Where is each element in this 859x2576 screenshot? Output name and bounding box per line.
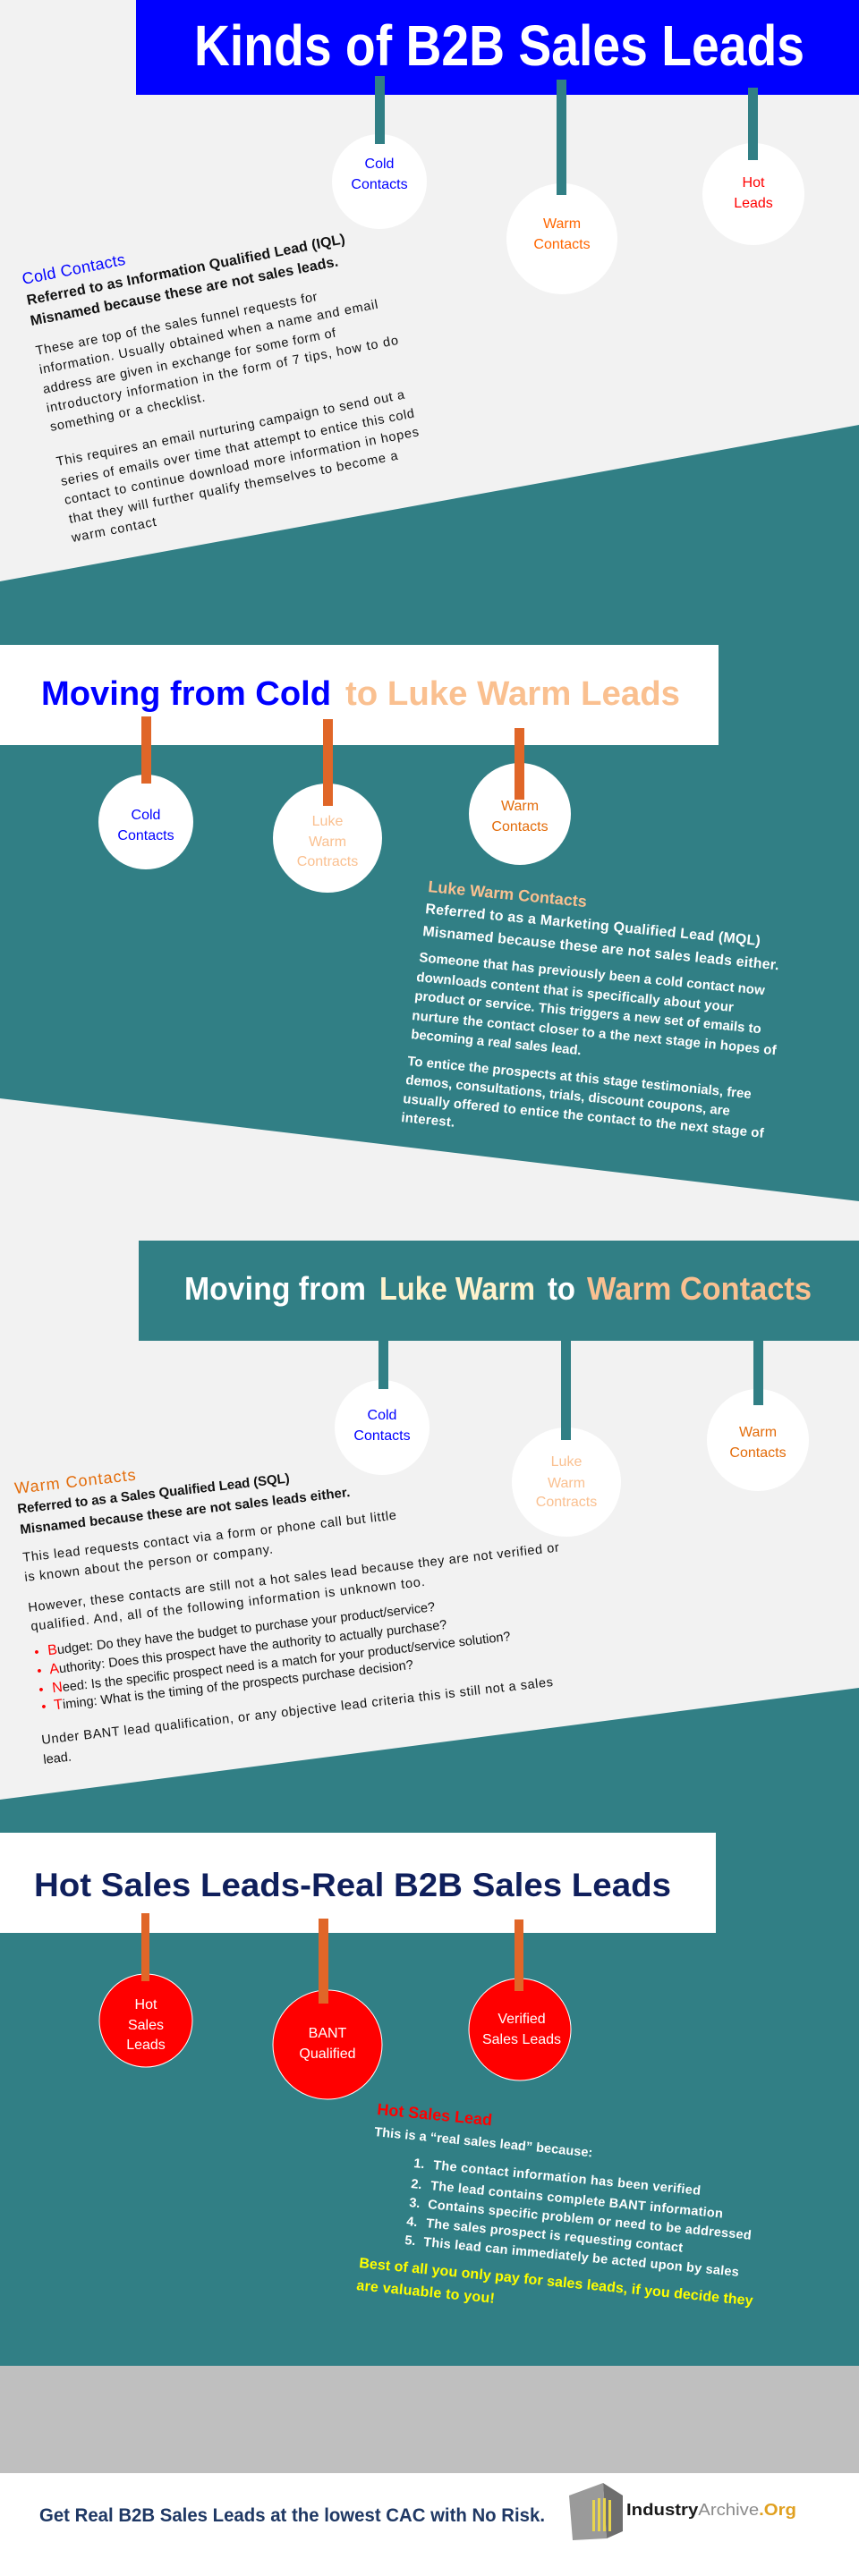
heading: Moving from Cold to Luke Warm Leads: [0, 645, 719, 745]
heading: Moving from Luke Warm to Warm Contacts: to: [548, 1270, 575, 1307]
text block: luke warm contacts description: Someone that has previously been a cold contact now: [419, 950, 766, 998]
text block: hot sales lead reasons: Contains specific problem or need to be addressed: [428, 2198, 752, 2243]
text block: warm contacts description with BANT list: B: [47, 1642, 58, 1658]
logo: IndustryArchive.Org: Industry Archive .Org: [626, 2501, 796, 2519]
circle: verified sales leads (section 4): [469, 1919, 571, 2080]
heading: Moving from Luke Warm to Warm Contacts: [139, 1241, 859, 1341]
circle: warm contacts (section 1): Warm: [543, 216, 581, 232]
circle: warm contacts (section 2): Warm: [501, 799, 539, 814]
text block: cold contacts description: Misnamed because these are not sales leads.: [30, 254, 339, 329]
text block: luke warm contacts description: Luke Warm Contacts: [428, 877, 588, 911]
circle: warm contacts (section 3): Warm: [739, 1425, 777, 1440]
heading: Moving from Cold to Luke Warm Leads: to Luke Warm Leads: [345, 675, 680, 713]
text block: hot sales lead reasons: The lead contains complete BANT information: [430, 2179, 724, 2222]
circle: luke warm contracts (section 3): Luke: [551, 1454, 582, 1470]
text block: hot sales lead reasons: The contact information has been verified: [433, 2158, 702, 2199]
text block: hot sales lead reasons: The sales prospect is requesting contact: [426, 2216, 684, 2256]
text block: luke warm contacts description: Misnamed because these are not sales leads either.: [422, 924, 779, 973]
text block: hot sales lead reasons: 3.: [409, 2196, 421, 2211]
text block: warm contacts description with BANT list: •: [34, 1646, 39, 1660]
text block: warm contacts description with BANT list: Under BANT lead qualification, or any objective lead criteria this is still not a sales: [41, 1675, 554, 1748]
circle: hot sales leads (section 4): Sales: [128, 2018, 164, 2033]
text block: hot sales lead reasons: 4.: [406, 2215, 418, 2230]
circle: luke warm contracts (section 3): Contracts: [536, 1495, 597, 1510]
circle: hot leads (section 1): Hot: [743, 175, 765, 191]
circle: cold contacts (section 2): Cold: [132, 808, 160, 823]
text block: cold contacts description: Referred to as Information Qualified Lead (IQL): [26, 232, 346, 309]
footer tagline: Get Real B2B Sales Leads at the lowest CAC with No Risk.: [39, 2505, 545, 2526]
circle: warm contacts (section 3): Contacts: [729, 1445, 787, 1461]
text block: hot sales lead reasons: are valuable to you!: [356, 2278, 496, 2307]
text block: cold contacts description: Cold Contacts: [21, 250, 127, 288]
circle: luke warm contracts (section 2): Contracts: [297, 854, 358, 869]
logo: IndustryArchive.Org: [569, 2483, 796, 2540]
heading: Moving from Luke Warm to Warm Contacts: Warm Contacts: [587, 1270, 812, 1307]
text block: cold contacts description: contact to continue download more information in hopes: [64, 425, 420, 508]
heading: Hot Sales Leads-Real B2B Sales Leads: [0, 1833, 716, 1933]
circle: warm contacts (section 2): [469, 728, 571, 865]
text block: warm contacts description with BANT list: A: [48, 1661, 60, 1677]
text block: cold contacts description: address are given in exchange for some form of: [42, 326, 338, 397]
text block: hot sales lead reasons: This lead can immediately be acted upon by sales: [423, 2235, 739, 2280]
text block: warm contacts description with BANT list: •: [41, 1700, 47, 1715]
text block: warm contacts description with BANT list: T: [53, 1697, 64, 1713]
text block: hot sales lead reasons: Best of all you only pay for sales leads, if you decide they: [359, 2256, 753, 2309]
text block: luke warm contacts description: interest.: [401, 1110, 455, 1131]
text block: hot sales lead reasons: This is a “real sales lead” because:: [374, 2125, 593, 2160]
circle: cold contacts (section 2): Contacts: [117, 828, 174, 843]
circle: luke warm contracts (section 3): [512, 1341, 621, 1537]
text block: warm contacts description with BANT list: However, these contacts are still not a hot sales lead because they are not verified or: [28, 1540, 560, 1615]
text block: hot sales lead reasons: [356, 2100, 753, 2309]
circle: BANT qualified (section 4): Qualified: [299, 2046, 356, 2062]
circle: cold contacts (section 1): [332, 76, 427, 229]
heading: Moving from Cold to Luke Warm Leads: Moving from Cold: [41, 675, 331, 713]
circle: BANT qualified (section 4): [273, 1919, 382, 2099]
heading: Moving from Luke Warm to Warm Contacts: Moving from: [184, 1270, 366, 1307]
text block: warm contacts description with BANT list: N: [51, 1680, 64, 1696]
text block: luke warm contacts description: nurture the contact closer to a the next stage in hopes of: [412, 1008, 778, 1058]
text block: luke warm contacts description: demos, consultations, trials, discount coupons, are: [405, 1072, 731, 1119]
text block: hot sales lead reasons: 5.: [404, 2233, 416, 2249]
circle: cold contacts (section 3): Contacts: [353, 1428, 411, 1444]
circle: BANT qualified (section 4): BANT: [309, 2026, 347, 2041]
text block: warm contacts description with BANT list: This lead requests contact via a form or phone call but little: [22, 1509, 397, 1565]
text block: hot sales lead reasons: 2.: [411, 2177, 422, 2192]
circle: cold contacts (section 3): Cold: [368, 1408, 396, 1423]
text block: cold contacts description: These are top of the sales funnel requests for: [35, 290, 319, 359]
text block: luke warm contacts description: To entice the prospects at this stage testimonials, free: [407, 1054, 752, 1102]
title: Kinds of B2B Sales Leads: [136, 0, 859, 95]
text block: warm contacts description with BANT list: qualified. And, all of the following information is unknown too.: [30, 1575, 426, 1634]
text block: hot sales lead reasons: Hot Sales Lead: [377, 2100, 493, 2129]
text block: luke warm contacts description: Referred to as a Marketing Qualified Lead (MQL): [425, 902, 761, 949]
circle: warm contacts (section 3): [707, 1341, 809, 1491]
text block: cold contacts description: introductory information in the form of 7 tips, how to do: [46, 334, 399, 416]
circle: cold contacts (section 1): Cold: [365, 157, 394, 172]
circle: luke warm contracts (section 3): Warm: [548, 1476, 585, 1491]
text block: hot sales lead reasons: 1.: [413, 2157, 425, 2172]
text block: warm contacts description with BANT list: Misnamed because these are not sales leads either.: [20, 1485, 351, 1538]
circle: warm contacts (section 1): Contacts: [533, 237, 591, 252]
text block: warm contacts description with BANT list: Warm Contacts: [13, 1466, 137, 1497]
text block: warm contacts description with BANT list: [13, 1466, 560, 1767]
circle: hot leads (section 1): [702, 88, 804, 245]
text block: cold contacts description: This requires an email nurturing campaign to send out a: [55, 387, 406, 470]
text block: luke warm contacts description: [401, 877, 779, 1141]
text block: luke warm contacts description: usually offered to entice the contact to the next stage of: [403, 1091, 765, 1141]
text block: warm contacts description with BANT list: uthority: Does this prospect have the authority to actually purchase?: [58, 1618, 447, 1676]
text block: warm contacts description with BANT list: iming: What is the timing of the prospects purchase decision?: [62, 1658, 414, 1712]
heading: Hot Sales Leads-Real B2B Sales Leads: Hot Sales Leads-Real B2B Sales Leads: [34, 1867, 671, 1903]
circle: luke warm contracts (section 2): [273, 719, 382, 893]
text block: warm contacts description with BANT list: lead.: [43, 1750, 72, 1767]
circle: hot sales leads (section 4): [99, 1913, 192, 2067]
circle: warm contacts (section 2): Contacts: [491, 819, 549, 835]
circle: luke warm contracts (section 2): Luke: [312, 814, 343, 829]
circle: hot sales leads (section 4): Hot: [135, 1997, 157, 2012]
circle: cold contacts (section 3): [335, 1341, 430, 1475]
circle: cold contacts (section 1): Contacts: [351, 177, 408, 192]
text block: warm contacts description with BANT list: •: [37, 1665, 42, 1679]
text block: cold contacts description: that they will further qualify themselves to become a: [68, 449, 400, 527]
circle: luke warm contracts (section 2): Warm: [309, 835, 346, 850]
text block: cold contacts description: something or a checklist.: [49, 391, 207, 435]
circle: cold contacts (section 2): [98, 716, 193, 869]
text block: cold contacts description: [21, 232, 420, 546]
text block: cold contacts description: information. Usually obtained when a name and email: [38, 298, 379, 377]
circle: hot leads (section 1): Leads: [734, 196, 773, 211]
text block: warm contacts description with BANT list: is known about the person or company.: [24, 1542, 274, 1585]
text block: luke warm contacts description: product or service. This triggers a new set of emails to: [414, 988, 761, 1037]
text block: luke warm contacts description: becoming a real sales lead.: [411, 1027, 582, 1058]
text block: cold contacts description: warm contact: [70, 515, 157, 546]
circle: verified sales leads (section 4): Sales Leads: [482, 2032, 561, 2047]
text block: warm contacts description with BANT list: •: [38, 1683, 44, 1698]
text block: warm contacts description with BANT list: Referred to as a Sales Qualified Lead (SQL): [17, 1470, 290, 1517]
heading: Moving from Luke Warm to Warm Contacts: Luke Warm: [379, 1270, 535, 1307]
circle: hot sales leads (section 4): Leads: [126, 2038, 166, 2053]
text block: luke warm contacts description: downloads content that is specifically about your: [416, 970, 735, 1015]
text block: warm contacts description with BANT list: udget: Do they have the budget to purchase your product/service?: [56, 1600, 436, 1657]
text block: cold contacts description: series of emails over time that attempt to entice this cold: [60, 407, 415, 489]
circle: verified sales leads (section 4): Verified: [498, 2012, 546, 2027]
circle: warm contacts (section 1): [506, 80, 617, 294]
text block: warm contacts description with BANT list: eed: Is the specific prospect need is a match for your product/service solution?: [62, 1630, 511, 1695]
